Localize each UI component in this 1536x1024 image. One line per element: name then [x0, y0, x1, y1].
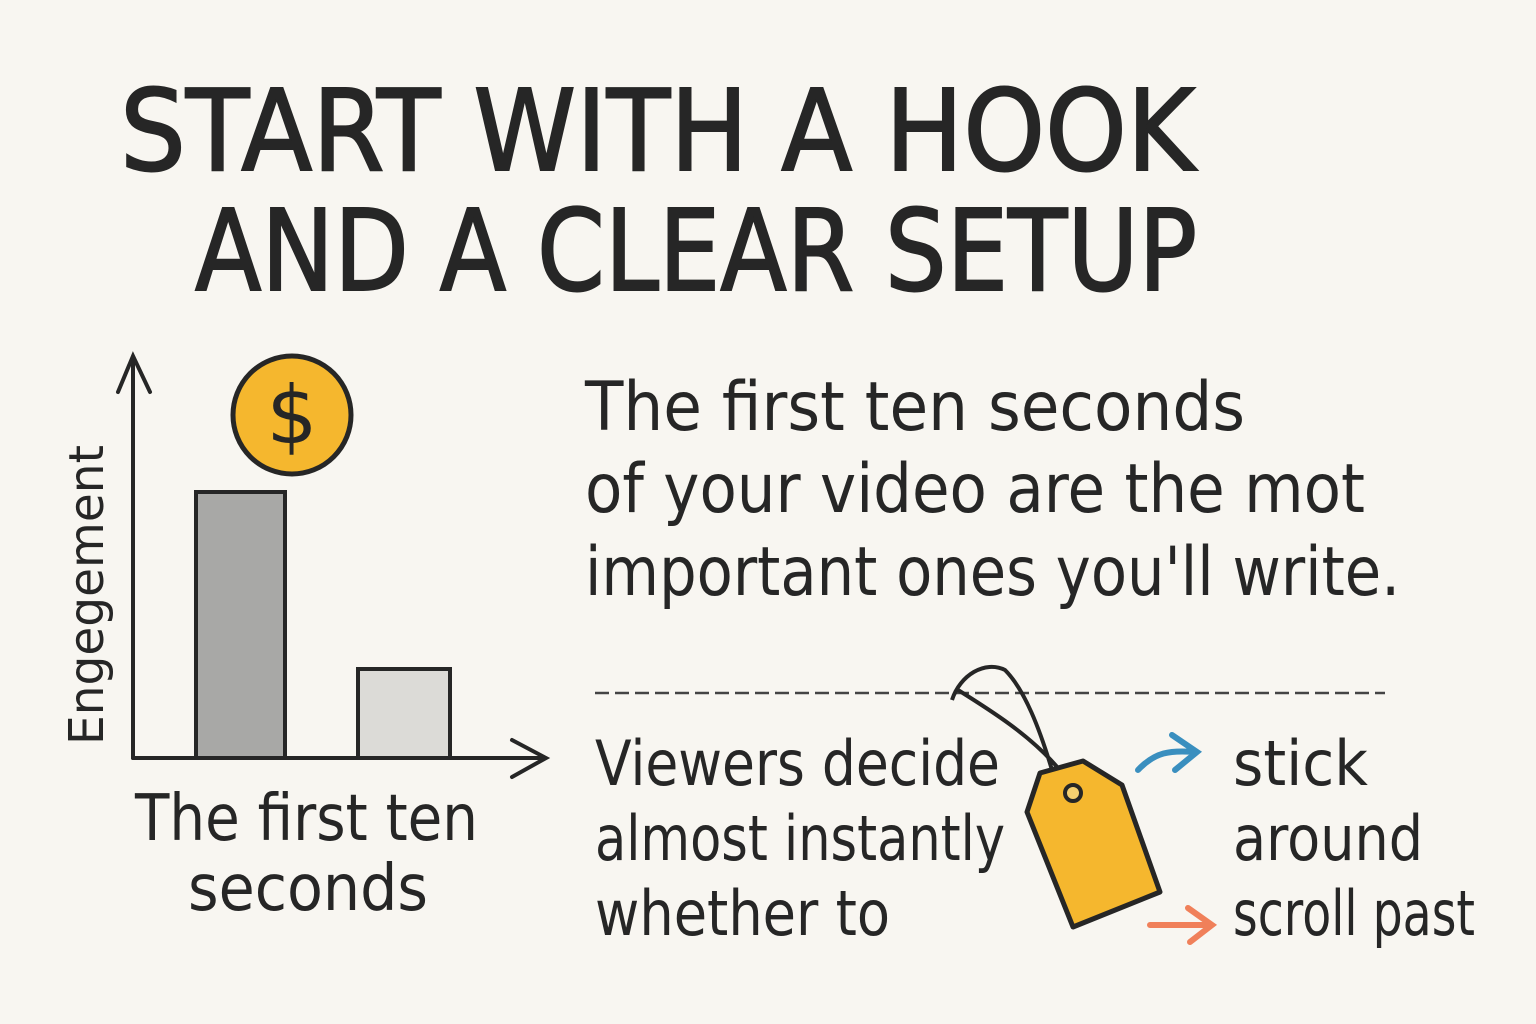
- x axis: [133, 740, 546, 777]
- title: AND A CLEAR SETUP: [195, 187, 1197, 317]
- text block: options: [1233, 727, 1475, 950]
- text block: viewers decide: [595, 727, 1005, 950]
- text block: viewers decide: almost instantly: [595, 802, 1005, 875]
- text block: options: around: [1233, 802, 1423, 875]
- icon: coin: $: [267, 369, 317, 462]
- text block: intro: of your video are the mot: [585, 450, 1365, 529]
- text block: options: stick: [1233, 727, 1368, 800]
- arrow: stick: [1138, 735, 1197, 770]
- bar: after: [358, 669, 450, 758]
- text block: viewers decide: whether to: [595, 877, 890, 950]
- bar chart: [59, 356, 546, 926]
- text block: intro: [584, 368, 1400, 612]
- arrow: scroll: [1150, 908, 1212, 942]
- text block: viewers decide: Viewers decide: [595, 727, 1000, 800]
- text block: intro: important ones you'll write.: [585, 533, 1400, 612]
- title: START WITH A HOOK: [120, 67, 1197, 197]
- icon: coin: [233, 356, 351, 474]
- y label: Engegement: [59, 445, 115, 745]
- y axis: [118, 356, 150, 758]
- title: [120, 67, 1197, 317]
- text block: intro: The first ten seconds: [584, 368, 1245, 447]
- bar: first ten seconds: [196, 492, 285, 758]
- bar chart: seconds: [188, 852, 428, 926]
- x label: The first ten: [134, 782, 478, 856]
- icon: tag: [952, 667, 1160, 927]
